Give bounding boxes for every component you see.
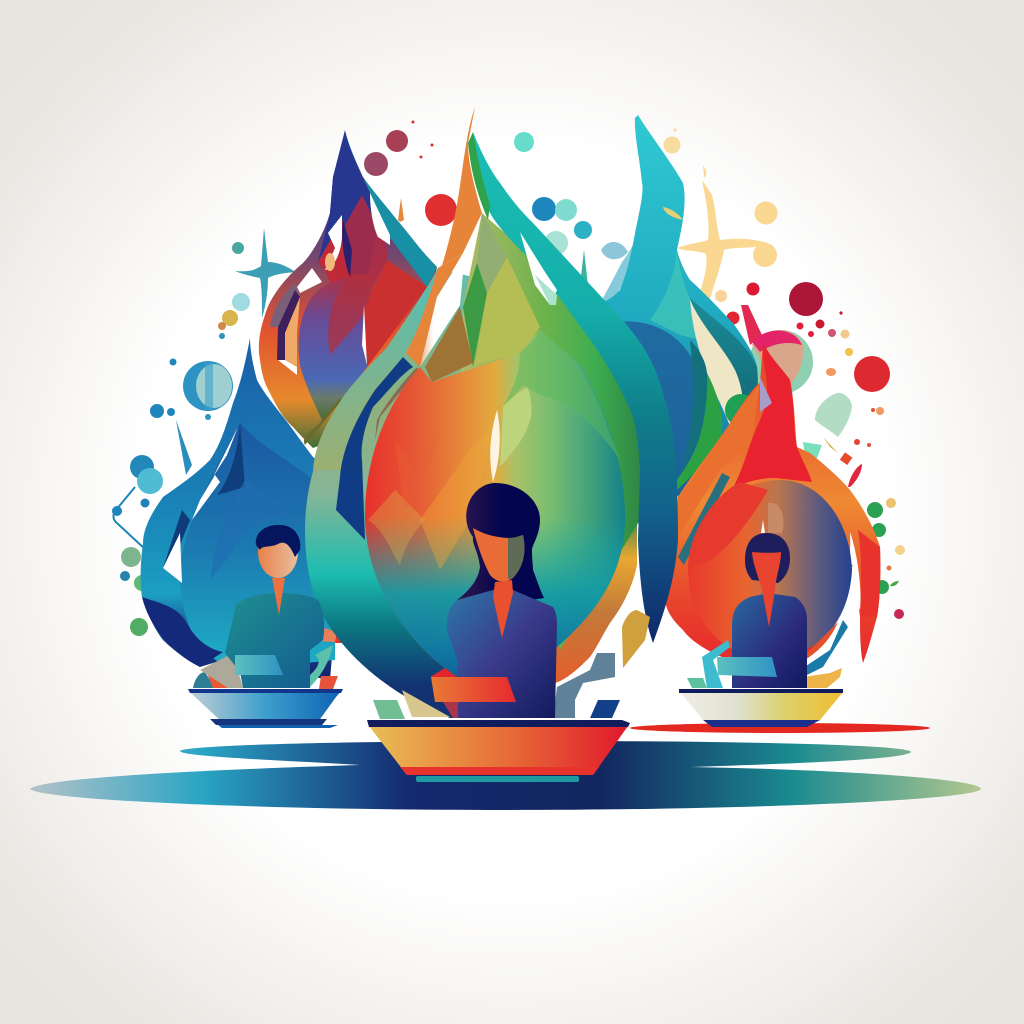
interior green (460, 213, 650, 650)
gray teal shapes (553, 653, 615, 718)
bowl: right (679, 689, 843, 727)
inner drop (365, 330, 625, 718)
ring right of the drop (550, 505, 637, 683)
flame: left blue (141, 338, 345, 689)
outer body (305, 268, 625, 718)
splatter: left side (112, 228, 296, 636)
dark green diamond and brown patch (463, 263, 487, 367)
left bands (313, 268, 438, 470)
flame: back right teal (600, 115, 758, 520)
white flame (490, 410, 500, 482)
splatter: top and right (364, 120, 905, 619)
pale lobe (500, 387, 532, 467)
figure: center woman (367, 483, 630, 782)
flame: center large (305, 107, 678, 719)
ground shadows (30, 723, 981, 810)
flame: right red (665, 343, 880, 688)
bowl: left (188, 689, 343, 728)
figure: left man (188, 525, 343, 728)
bowl: center (367, 720, 630, 782)
figure: right woman (679, 533, 843, 727)
flame: back left red and blue (259, 130, 437, 448)
teal ribbon and spike (473, 132, 678, 643)
orange sliver (313, 107, 482, 490)
white slits (520, 232, 557, 305)
